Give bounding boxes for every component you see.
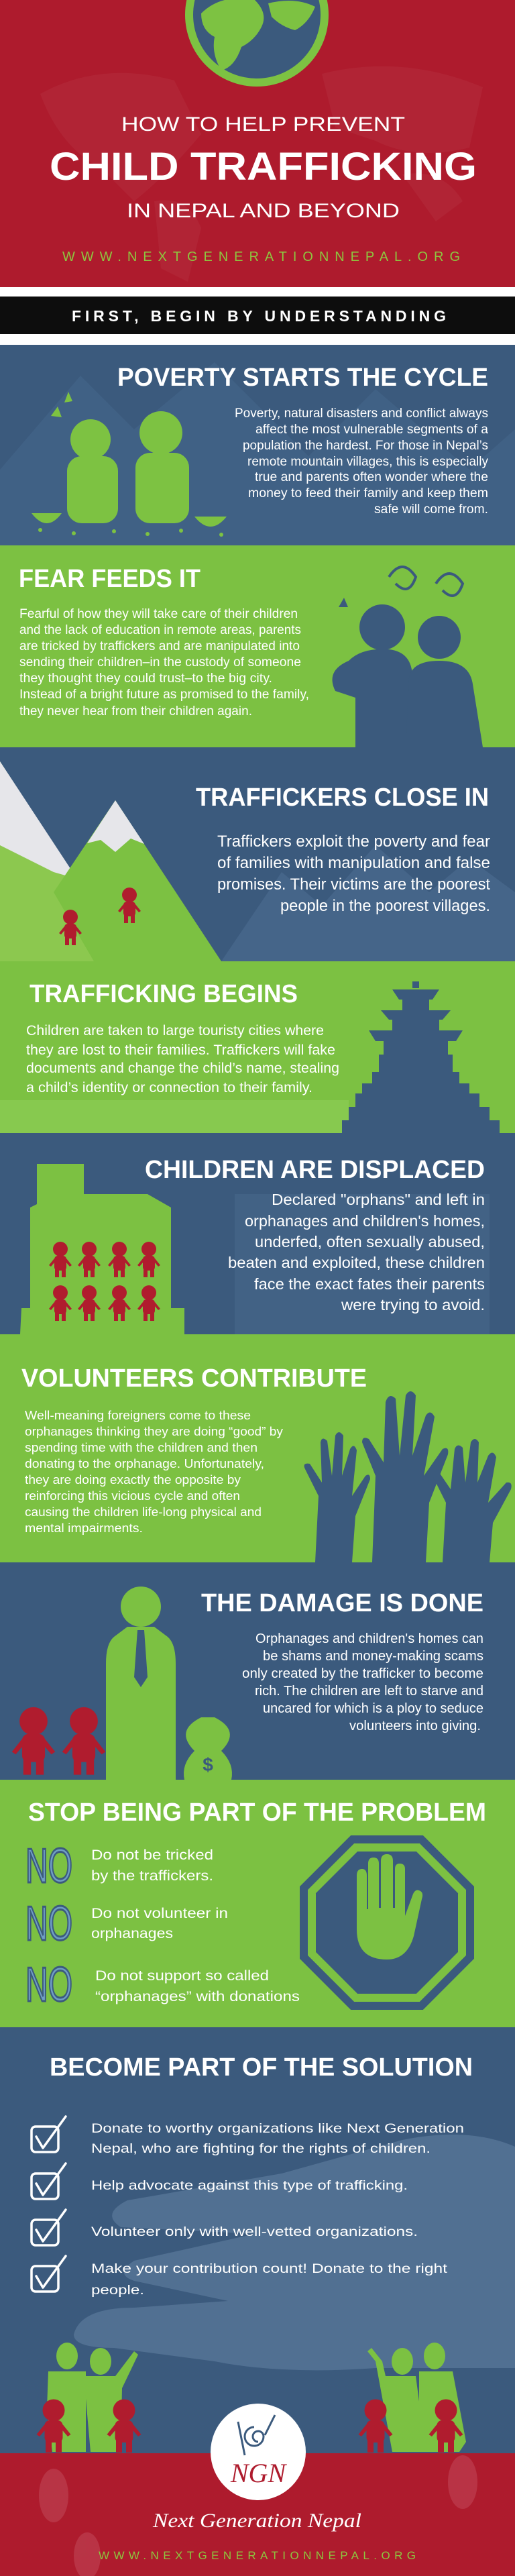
text block: Fearful of how they will take care of their children (19, 607, 298, 621)
text block: safe will come from. (374, 502, 488, 517)
text block (217, 833, 490, 915)
list: no items: NO (25, 1897, 72, 1951)
heading: BECOME PART OF THE SOLUTION (50, 2053, 473, 2082)
checklist: Volunteer only with well-vetted organizations. (91, 2225, 418, 2239)
text block: promises. Their victims are the poorest (217, 875, 490, 894)
panel: fear (0, 545, 515, 747)
url: WWW.NEXTGENERATIONNEPAL.ORG (99, 2549, 416, 2562)
text block: donating to the orphanage. Unfortunately, (25, 1457, 264, 1470)
heading: CHILDREN ARE DISPLACED (145, 1156, 485, 1184)
list: no items: Do not support so called (95, 1968, 269, 1984)
text block: sending their children–in the custody of someone (19, 655, 301, 669)
text block: mental impairments. (25, 1521, 143, 1535)
org name: Next Generation Nepal (152, 2510, 361, 2532)
icon: globe (185, 0, 329, 87)
checklist: Help advocate against this type of trafficking. (91, 2179, 408, 2193)
text block (235, 407, 488, 517)
heading: FEAR FEEDS IT (19, 565, 201, 593)
icon: orphanage building (20, 1164, 184, 1334)
text block: they never hear from their children again. (19, 704, 252, 718)
banner: first begin by understanding: FIRST, BEGIN BY UNDERSTANDING (72, 307, 446, 325)
icon: sad sitting children (32, 392, 227, 537)
title: HOW TO HELP PREVENT (121, 113, 405, 136)
text block: affect the most vulnerable segments of a (255, 423, 488, 437)
list: no items: Do not volunteer in (91, 1906, 228, 1921)
text block (26, 1023, 339, 1095)
text block: underfed, often sexually abused, (255, 1233, 485, 1250)
icon: mountains (0, 761, 221, 961)
text block: money to feed their family and keep them (248, 486, 488, 500)
text block: face the exact fates their parents (254, 1275, 485, 1293)
list: no items: NO (25, 1839, 72, 1893)
icon: raised hands (304, 1391, 512, 1562)
logo: NGN: NGN (230, 2458, 287, 2488)
logo: NGN (211, 2404, 306, 2500)
heading: TRAFFICKERS CLOSE IN (196, 784, 489, 812)
text block: population the hardest. For those in Nepal’s (243, 439, 488, 453)
checklist (32, 2116, 464, 2298)
text block: people in the poorest villages. (280, 897, 490, 915)
heading: STOP BEING PART OF THE PROBLEM (28, 1799, 486, 1827)
heading: THE DAMAGE IS DONE (201, 1589, 483, 1617)
text block: they are doing exactly the opposite by (25, 1473, 241, 1487)
text block: causing the children life-long physical and (25, 1505, 262, 1519)
icon: pagoda (342, 981, 500, 1133)
text block: orphanages thinking they are doing “good” by (25, 1425, 283, 1438)
text block: only created by the trafficker to become (242, 1666, 483, 1681)
heading: POVERTY STARTS THE CYCLE (117, 364, 488, 392)
text block: orphanages and children's homes, (245, 1212, 485, 1230)
text block: Well-meaning foreigners come to these (25, 1409, 251, 1422)
panel: trafficking begins (0, 961, 515, 1133)
title: IN NEPAL AND BEYOND (127, 200, 400, 222)
icon: family right (358, 2343, 466, 2453)
text block: rich. The children are left to starve and (255, 1684, 483, 1699)
heading: VOLUNTEERS CONTRIBUTE (21, 1364, 367, 1393)
checklist: people. (91, 2284, 144, 2298)
text block: uncared for which is a ploy to seduce (263, 1701, 483, 1716)
panel: damage done (0, 1562, 515, 1780)
text block: Declared "orphans" and left in (272, 1191, 485, 1208)
text block: true and parents often wonder where the (255, 470, 488, 484)
list: no items: Do not be tricked (91, 1847, 213, 1863)
text block (228, 1191, 485, 1313)
text block: documents and change the child’s name, stealing (26, 1061, 339, 1076)
text block: spending time with the children and then (25, 1441, 258, 1454)
text block: of families with manipulation and false (217, 854, 490, 872)
text block: Poverty, natural disasters and conflict always (235, 407, 488, 421)
list: no items (25, 1839, 300, 2012)
text block: they are lost to their families. Traffickers will fake (26, 1042, 335, 1058)
panel: stop being part of the problem (0, 1780, 515, 2027)
text block: Traffickers exploit the poverty and fear (217, 833, 490, 851)
checklist: Make your contribution count! Donate to the right (91, 2262, 448, 2276)
list: no items: NO (25, 1958, 72, 2012)
icon: trafficker with money: $ (203, 1754, 213, 1775)
header panel (0, 0, 515, 287)
text block: Orphanages and children's homes can (255, 1631, 483, 1646)
text block: reinforcing this vicious cycle and often (25, 1489, 240, 1503)
list: no items: by the traffickers. (91, 1868, 213, 1884)
list: no items: “orphanages” with donations (95, 1989, 300, 2004)
text block: were trying to avoid. (341, 1296, 485, 1313)
text block (19, 607, 309, 718)
list: no items: orphanages (91, 1926, 173, 1941)
icon: trafficker with money (12, 1587, 232, 1780)
icon: worried parents (333, 567, 483, 747)
text block: a child’s identity or connection to their family. (26, 1080, 312, 1095)
text block (242, 1631, 483, 1733)
banner: first begin by understanding (0, 297, 515, 334)
footer panel (0, 2404, 515, 2576)
title: CHILD TRAFFICKING (50, 145, 477, 189)
panel: volunteers (0, 1334, 515, 1562)
text block (25, 1409, 283, 1535)
text block: they thought they could trust–to the big city. (19, 672, 272, 686)
panel: children displaced (0, 1133, 515, 1334)
title (50, 113, 477, 222)
text block: beaten and exploited, these children (228, 1254, 485, 1271)
text block: remote mountain villages, this is especially (247, 455, 488, 469)
text block: volunteers into giving. (349, 1719, 481, 1733)
text block: Children are taken to large touristy cities where (26, 1023, 324, 1038)
text block: and the lack of education in remote areas, parents (19, 623, 301, 637)
text block: Instead of a bright future as promised to the family, (19, 688, 309, 702)
checklist: Nepal, who are fighting for the rights of children. (91, 2142, 431, 2156)
text block: are tricked by traffickers and are manipulated into (19, 639, 300, 653)
panel: traffickers close in (0, 747, 515, 961)
icon: family left (36, 2343, 141, 2453)
background hands (74, 2135, 515, 2370)
panel: poverty (0, 345, 515, 545)
heading: TRAFFICKING BEGINS (30, 980, 298, 1008)
icon: stop sign hand (300, 1835, 474, 2010)
checklist: Donate to worthy organizations like Next Generation (91, 2122, 464, 2136)
url: WWW.NEXTGENERATIONNEPAL.ORG (62, 250, 460, 264)
text block: be shams and money-making scams (263, 1649, 483, 1664)
panel: become part of the solution (0, 2027, 515, 2453)
